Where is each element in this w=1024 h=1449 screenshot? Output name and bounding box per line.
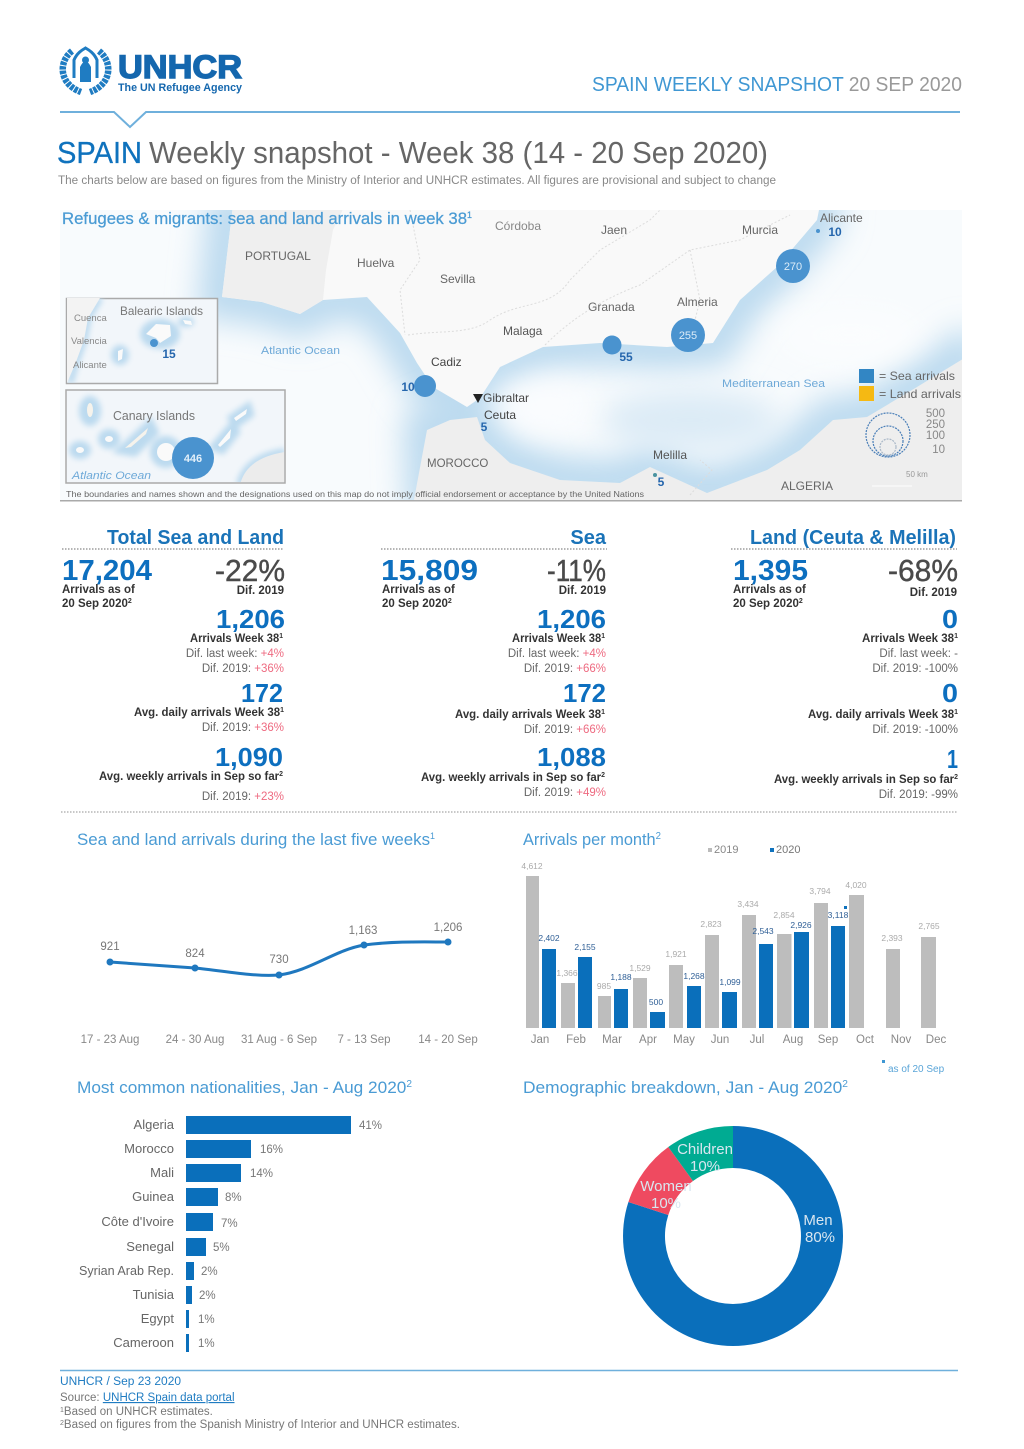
legend: 2020: [776, 844, 800, 856]
place labels: Gibraltar: [483, 391, 529, 405]
footer: source and notes: Source: UNHCR Spain data portal: [60, 1392, 234, 1404]
bar chart: arrivals per month: Jul: [750, 1034, 764, 1046]
map legend: 10: [932, 444, 945, 456]
difference 2019: -11%: [547, 553, 606, 588]
wordmark: UNHCR: [118, 49, 242, 85]
map disclaimer: The boundaries and names shown and the designations used on this map do not imply official endorsement or acceptance by the United Nations: [66, 490, 644, 499]
average daily: Dif. 2019: -100%: [872, 724, 958, 736]
bar chart: nationalities: Syrian Arab Rep.: [79, 1263, 174, 1278]
average daily: Avg. daily arrivals Week 38: [134, 707, 281, 719]
donut chart: demographics: [623, 1126, 843, 1346]
bar chart: nationalities: Tunisia: [133, 1287, 175, 1302]
average weekly: [774, 746, 958, 801]
total arrivals: 2: [128, 598, 132, 605]
total arrivals: Arrivals as of: [382, 584, 455, 596]
bar chart: arrivals per month: 3,118: [828, 910, 849, 920]
average weekly: 2: [601, 772, 605, 779]
average daily: 1: [280, 707, 284, 714]
place labels: ALGERIA: [781, 479, 833, 493]
heading: Sea: [570, 527, 607, 549]
bar chart: nationalities: 1%: [198, 1338, 215, 1350]
average weekly: Avg. weekly arrivals in Sep so far: [99, 771, 281, 783]
tagline: The UN Refugee Agency: [118, 82, 243, 94]
arrivals week 38: 0: [942, 606, 958, 634]
bubbles: 55: [619, 350, 633, 364]
total arrivals: 20 Sep 2020: [62, 598, 128, 610]
bar chart: arrivals per month: Nov: [891, 1034, 911, 1046]
map legend: = Land arrivals: [879, 387, 961, 401]
bar chart: arrivals per month: 2,402: [538, 933, 560, 943]
bar chart: arrivals per month: 1,529: [629, 963, 651, 973]
place labels: Almeria: [677, 295, 718, 309]
map legend: [859, 369, 961, 486]
bar chart: arrivals per month: 1,921: [665, 949, 687, 959]
total arrivals: [733, 555, 808, 610]
bar chart: arrivals per month: 2,393: [881, 933, 903, 943]
donut chart: demographics: 10%: [690, 1158, 720, 1175]
total arrivals: 20 Sep 2020: [733, 598, 799, 610]
bar chart: arrivals per month: 2,155: [574, 942, 596, 952]
legend: [708, 844, 800, 856]
difference 2019: -22%: [215, 553, 285, 588]
bar chart: nationalities: Mali: [150, 1165, 174, 1180]
panel: land stats: [733, 527, 958, 801]
average daily: [455, 680, 606, 736]
place labels: Granada: [588, 300, 635, 314]
footer: source and notes: 2: [60, 1420, 64, 1427]
line chart: arrivals last five weeks: 14 - 20 Sep: [418, 1034, 478, 1046]
map legend: 250: [926, 419, 945, 431]
line chart: arrivals last five weeks: 7 - 13 Sep: [337, 1034, 391, 1046]
arrivals week 38: Dif. last week: +4%: [508, 648, 606, 660]
place labels: Melilla: [653, 448, 687, 462]
line chart: arrivals last five weeks: 24 - 30 Aug: [166, 1034, 224, 1046]
heading: Land (Ceuta & Melilla): [750, 527, 956, 549]
arrivals week 38: [508, 606, 606, 675]
bar chart: arrivals per month: 4,020: [845, 880, 867, 890]
footnote: as of 20 Sep: as of 20 Sep: [888, 1064, 945, 1075]
bar chart: nationalities: 14%: [250, 1168, 273, 1180]
donut chart: demographics: Men: [803, 1212, 833, 1229]
heading: nationalities: Most common nationalities, Jan - Aug 2020: [77, 1078, 402, 1097]
heading: demographic breakdown: 2: [842, 1079, 848, 1090]
panel: total sea and land stats: [62, 527, 285, 803]
inset: Balearic Islands: Alicante: [73, 360, 107, 371]
difference 2019: -68%: [888, 553, 958, 588]
bar chart: nationalities: Algeria: [134, 1117, 175, 1132]
icon: Gibraltar marker: [473, 394, 483, 403]
inset: Canary Islands: 446: [184, 453, 202, 465]
bar chart: arrivals per month: 2,926: [790, 920, 812, 930]
map heading: 1: [467, 210, 472, 220]
bar chart: arrivals per month: Sep: [818, 1034, 838, 1046]
heading: nationalities: 2: [406, 1079, 412, 1090]
panel: map of sea and land arrivals: Mediterranean Sea: [722, 378, 826, 390]
arrivals week 38: 1,206: [537, 606, 606, 634]
inset: Balearic Islands: Valencia: [71, 336, 107, 347]
average weekly: [421, 744, 606, 799]
panel: sea stats: [381, 527, 607, 799]
map heading: Refugees & migrants: sea and land arrivals in week 38: [62, 209, 473, 228]
total arrivals: 15,809: [381, 555, 478, 587]
bar chart: arrivals per month: 3,434: [737, 899, 759, 909]
heading: five weeks line chart: Sea and land arrivals during the last five weeks: [77, 830, 432, 849]
average daily: Avg. daily arrivals Week 38: [455, 709, 602, 721]
bubbles: 255: [679, 330, 697, 342]
bar chart: nationalities: Egypt: [141, 1311, 174, 1326]
arrivals week 38: 1: [601, 633, 605, 640]
land: North Africa: [413, 357, 966, 505]
place labels: MOROCCO: [427, 458, 488, 470]
bar chart: arrivals per month: Jun: [711, 1034, 729, 1046]
bar chart: arrivals per month: 985: [597, 981, 611, 991]
place labels: Malaga: [503, 324, 543, 338]
place labels: [245, 211, 863, 493]
bar chart: arrivals per month: 1,099: [719, 977, 741, 987]
line chart: arrivals last five weeks: [81, 922, 478, 1046]
total arrivals: [62, 555, 152, 610]
heading: arrivals per month: Arrivals per month: [523, 830, 661, 849]
bar chart: nationalities: Senegal: [126, 1239, 174, 1254]
place labels: Huelva: [357, 256, 395, 270]
bar chart: arrivals per month: 3,794: [809, 886, 831, 896]
footer: source and notes: Based on figures from the Spanish Ministry of Interior and UNHCR estimates.: [64, 1419, 460, 1431]
donut chart: demographics: Children: [677, 1141, 733, 1158]
donut chart: demographics: 80%: [805, 1229, 835, 1246]
bubbles: 5: [481, 420, 488, 434]
place labels: Alicante: [820, 211, 863, 225]
arrivals week 38: Dif. 2019: +66%: [524, 663, 606, 675]
bar chart: nationalities: 8%: [225, 1192, 242, 1204]
total arrivals: 1,395: [733, 555, 808, 587]
average weekly: Dif. 2019: +49%: [524, 787, 606, 799]
bar chart: arrivals per month: Oct: [856, 1034, 875, 1046]
average daily: 1: [601, 709, 605, 716]
average daily: Avg. daily arrivals Week 38: [808, 709, 955, 721]
bar chart: arrivals per month: 2,765: [918, 921, 940, 931]
line chart: arrivals last five weeks: 921: [100, 941, 120, 953]
bar chart: arrivals per month: Aug: [783, 1034, 803, 1046]
average weekly: 1,088: [537, 744, 606, 772]
arrivals week 38: Dif. last week: +4%: [186, 648, 284, 660]
bubbles: [401, 225, 842, 489]
legend: 2019: [714, 844, 738, 856]
header snapshot label: SPAIN WEEKLY SNAPSHOT 20 SEP 2020: [592, 74, 962, 96]
bar chart: arrivals per month: Apr: [639, 1034, 657, 1046]
bar chart: arrivals per month: 4,612: [521, 861, 543, 871]
total arrivals: 2: [799, 598, 803, 605]
arrivals week 38: 1: [279, 633, 283, 640]
bar chart: arrivals per month: Mar: [602, 1034, 622, 1046]
place labels: Ceuta: [484, 408, 516, 422]
average daily: Dif. 2019: +66%: [524, 724, 606, 736]
average weekly: Dif. 2019: -99%: [879, 789, 958, 801]
arrivals week 38: [862, 606, 958, 675]
arrivals week 38: Dif. 2019: +36%: [202, 663, 284, 675]
title: Weekly snapshot - Week 38 (14 - 20 Sep 2020): [149, 135, 768, 170]
average weekly: [99, 744, 284, 803]
place labels: Jaen: [601, 223, 627, 237]
donut chart: demographics: 10%: [651, 1195, 681, 1212]
subtitle: The charts below are based on figures from the Ministry of Interior and UNHCR estimates. All figures are provisional and subject to change: [58, 175, 776, 187]
sea labels: Atlantic Ocean: [261, 345, 340, 357]
total arrivals: Arrivals as of: [733, 584, 806, 596]
panel: map of sea and land arrivals: [60, 210, 962, 502]
bar chart: nationalities: 2%: [201, 1266, 218, 1278]
inset: Balearic Islands: 15: [162, 347, 176, 361]
difference 2019: Dif. 2019: [237, 585, 284, 597]
heading: arrivals per month: 2: [656, 831, 661, 842]
bar chart: arrivals per month: Dec: [926, 1034, 946, 1046]
bubbles: 10: [401, 380, 415, 394]
inset: Balearic Islands: [66, 298, 218, 384]
average weekly: Avg. weekly arrivals in Sep so far: [774, 774, 956, 786]
footer: source and notes: [60, 1376, 460, 1431]
bar chart: arrivals per month: 2,543: [752, 926, 774, 936]
bar chart: nationalities: Morocco: [124, 1141, 174, 1156]
bar chart: arrivals per month: 500: [649, 997, 663, 1007]
arrivals week 38: Arrivals Week 38: [512, 633, 604, 645]
arrivals week 38: Arrivals Week 38: [190, 633, 282, 645]
arrivals week 38: Dif. last week: -: [879, 648, 958, 660]
land: Iberia: [222, 205, 820, 407]
average daily: Dif. 2019: +36%: [202, 722, 284, 734]
arrivals week 38: 1: [954, 633, 958, 640]
arrivals week 38: Dif. 2019: -100%: [872, 663, 958, 675]
heading: five weeks line chart: 1: [430, 831, 435, 841]
bar chart: nationalities: 5%: [213, 1242, 230, 1254]
bar chart: nationalities: 7%: [221, 1218, 238, 1230]
bar chart: nationalities: [79, 1116, 382, 1352]
total arrivals: 2: [448, 598, 452, 605]
bar chart: nationalities: 41%: [359, 1120, 382, 1132]
line chart: arrivals last five weeks: 1,206: [434, 922, 462, 934]
average daily: 172: [563, 680, 606, 708]
bubbles: 5: [658, 475, 665, 489]
total arrivals: 17,204: [62, 555, 152, 587]
average daily: 1: [954, 709, 958, 716]
heading: Total Sea and Land: [107, 527, 284, 549]
map legend: 50 km: [906, 470, 928, 479]
difference 2019: [547, 553, 606, 597]
difference 2019: Dif. 2019: [559, 585, 606, 597]
header logo: UNHCR: [63, 48, 243, 94]
average weekly: 2: [279, 771, 283, 778]
footer: source and notes: 1: [60, 1407, 64, 1414]
line chart: arrivals last five weeks: 1,163: [349, 925, 377, 937]
title: SPAIN: [57, 135, 142, 170]
map legend: 500: [926, 408, 945, 420]
bar chart: nationalities: 16%: [260, 1144, 283, 1156]
bar chart: arrivals per month: Jan: [531, 1034, 549, 1046]
average weekly: 2: [954, 774, 958, 781]
map legend: 100: [926, 430, 945, 442]
inset: Canary Islands: [66, 390, 285, 485]
bar chart: nationalities: Guinea: [132, 1189, 175, 1204]
bar chart: nationalities: 1%: [198, 1314, 215, 1326]
footer: source and notes: Based on UNHCR estimates.: [64, 1406, 213, 1418]
average weekly: 1,090: [215, 744, 283, 772]
arrivals week 38: 1,206: [216, 606, 285, 634]
line chart: arrivals last five weeks: 31 Aug - 6 Sep: [241, 1034, 317, 1046]
footer: source and notes: UNHCR / Sep 23 2020: [60, 1376, 181, 1388]
bar chart: arrivals per month: 2,854: [773, 910, 795, 920]
bar chart: nationalities: 2%: [199, 1290, 216, 1302]
average daily: [808, 680, 958, 736]
bubbles: 270: [784, 261, 802, 273]
line chart: arrivals last five weeks: 824: [185, 948, 205, 960]
line chart: arrivals last five weeks: 17 - 23 Aug: [81, 1034, 139, 1046]
bar chart: arrivals per month: [521, 844, 946, 1075]
arrivals week 38: [186, 606, 285, 675]
inset: Canary Islands: Atlantic Ocean: [71, 470, 151, 482]
inset: Canary Islands: Canary Islands: [113, 408, 195, 423]
place labels: PORTUGAL: [245, 249, 311, 263]
place labels: Córdoba: [495, 219, 541, 233]
average daily: [134, 680, 284, 734]
average daily: 0: [942, 680, 958, 708]
average weekly: Avg. weekly arrivals in Sep so far: [421, 772, 603, 784]
difference 2019: Dif. 2019: [910, 587, 957, 599]
bar chart: arrivals per month: 1,366: [556, 968, 578, 978]
bar chart: arrivals per month: 2,823: [700, 919, 722, 929]
total arrivals: Arrivals as of: [62, 584, 135, 596]
average weekly: Dif. 2019: +23%: [202, 791, 284, 803]
place labels: Cadiz: [431, 355, 462, 369]
heading: demographic breakdown: Demographic breakdown, Jan - Aug 2020: [523, 1078, 836, 1097]
bar chart: arrivals per month: Feb: [566, 1034, 586, 1046]
donut chart: demographics: Women: [640, 1178, 692, 1195]
average weekly: 1: [947, 746, 958, 774]
place labels: Sevilla: [440, 272, 476, 286]
bar chart: nationalities: Côte d'Ivoire: [101, 1214, 174, 1229]
total arrivals: [381, 555, 478, 610]
footnote: as of 20 Sep: [882, 1060, 945, 1075]
bar chart: arrivals per month: May: [673, 1034, 695, 1046]
total arrivals: 20 Sep 2020: [382, 598, 448, 610]
icon: UNHCR emblem: [63, 48, 108, 92]
line chart: arrivals last five weeks: 730: [269, 954, 289, 966]
map legend: = Sea arrivals: [879, 369, 955, 383]
inset: Balearic Islands: Cuenca: [74, 313, 107, 324]
inset: Balearic Islands: Balearic Islands: [120, 304, 203, 318]
arrivals week 38: Arrivals Week 38: [862, 633, 954, 645]
average daily: 172: [241, 680, 283, 708]
bubbles: 10: [828, 225, 842, 239]
place labels: Murcia: [742, 223, 778, 237]
bar chart: nationalities: Cameroon: [113, 1335, 174, 1350]
bar chart: arrivals per month: 1,268: [683, 971, 705, 981]
bar chart: arrivals per month: 1,188: [610, 972, 632, 982]
